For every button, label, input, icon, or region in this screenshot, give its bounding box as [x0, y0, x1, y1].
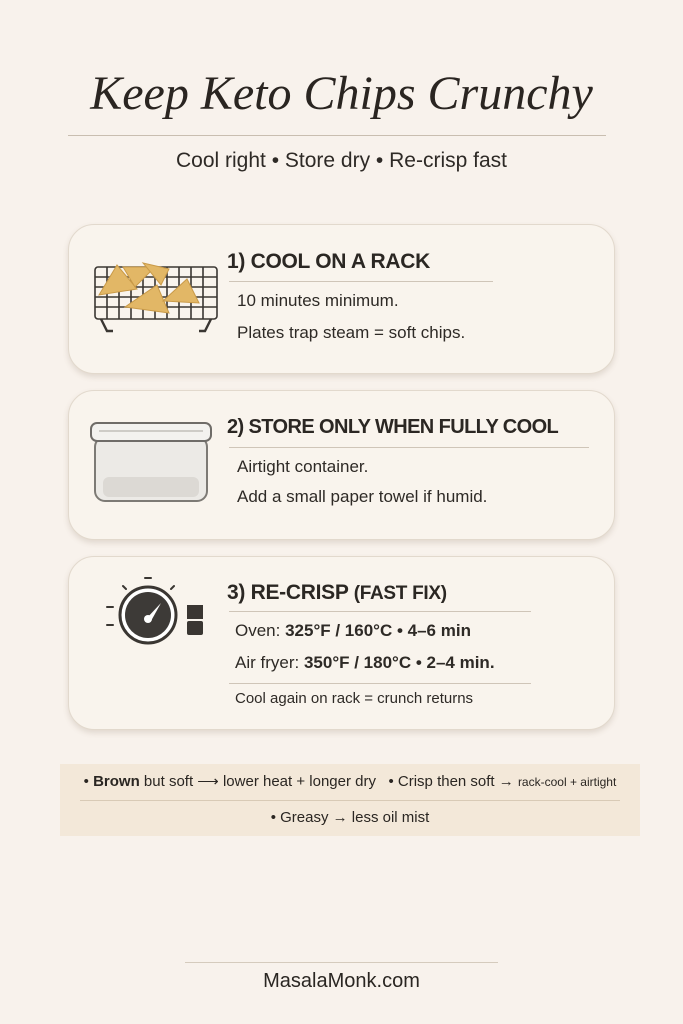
- panel: store when cool: Add a small paper towel if humid.: [237, 487, 487, 506]
- panel: cool on a rack: Plates trap steam = soft chips.: [237, 323, 465, 342]
- subtitle: Cool right • Store dry • Re-crisp fast: [176, 149, 507, 172]
- panel: re-crisp: Cool again on rack = crunch returns: [235, 690, 473, 707]
- title: Keep Keto Chips Crunchy: [90, 67, 593, 120]
- callout: troubleshooting band: • Brown but soft ⟶ lower heat + longer dry • Crisp then soft → rack-cool + airtight: [84, 773, 616, 790]
- callout: troubleshooting band: [60, 764, 640, 836]
- panel: cool on a rack: [68, 224, 615, 374]
- panel: store when cool: [68, 390, 615, 540]
- panel: re-crisp: [68, 556, 615, 730]
- icon: cooling rack with chips: [94, 262, 218, 332]
- heading: 1) COOL ON A RACK: [227, 250, 430, 273]
- heading: 3) RE-CRISP (FAST FIX): [227, 581, 447, 604]
- icon: airtight container: [90, 422, 212, 502]
- icon: timer dial: [106, 577, 203, 644]
- panel: re-crisp: Air fryer: 350°F / 180°C • 2–4 min.: [235, 653, 495, 672]
- footer: MasalaMonk.com: [263, 970, 420, 992]
- heading: 2) STORE ONLY WHEN FULLY COOL: [227, 416, 558, 438]
- text: 10 minutes minimum.: [237, 291, 399, 310]
- callout: troubleshooting band: • Greasy → less oil mist: [271, 809, 429, 826]
- text: Airtight container.: [237, 457, 368, 476]
- text: Oven: 325°F / 160°C • 4–6 min: [235, 621, 471, 640]
